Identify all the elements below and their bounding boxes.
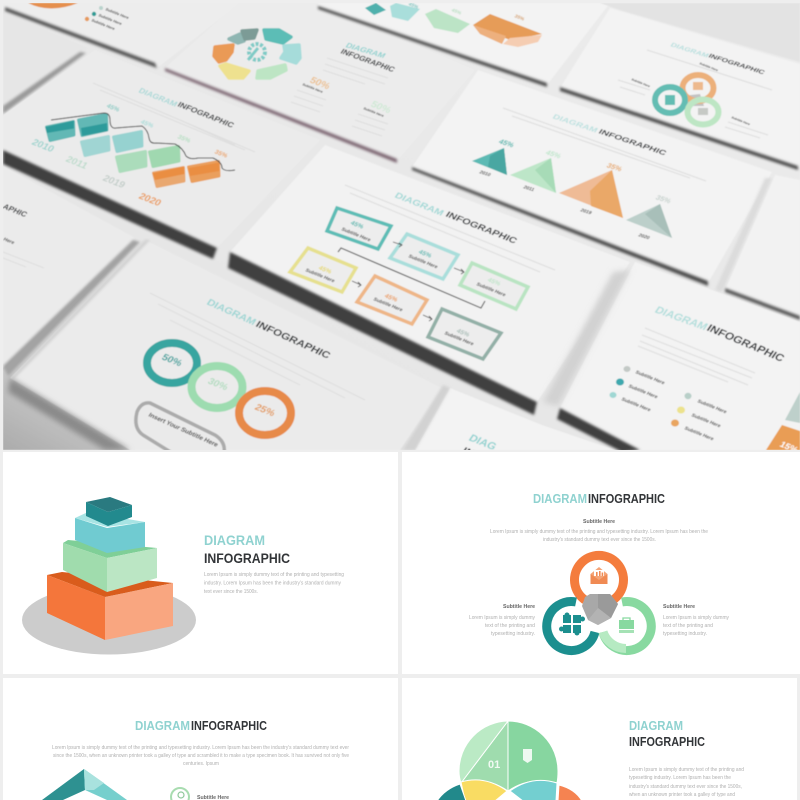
- panel: wheel slide: [163, 28, 399, 164]
- panel: three circle slide: Subtitle Here: [630, 78, 651, 88]
- chart: overlapping rings: [655, 75, 718, 124]
- chart: cropped pyramid shapes: [766, 392, 800, 454]
- text: right subtitle block: Subtitle Here: [663, 604, 695, 610]
- text: triangle years: 2011: [522, 185, 536, 193]
- text: pyramid body: text ever since the 1500s.: [204, 589, 258, 595]
- chart: triangles: [472, 148, 672, 238]
- flow box: teal: 45%: [349, 220, 365, 231]
- text: roof body: Lorem Ipsum is simply dummy text of the printing and typesetting industry. Lorem Ipsum has been the industry's standard dummy text ever: [52, 745, 349, 751]
- panel: wheel slide: Subtitle Here: [362, 107, 385, 118]
- chart: venn petals: [437, 721, 582, 800]
- panel: cubes slide: 45%: [450, 8, 463, 17]
- heading: venn title: INFOGRAPHIC: [629, 734, 706, 749]
- text: left subtitle block: text of the printing and: [485, 623, 535, 629]
- text: roof body: since the 1500s, when an unknown printer took a galley of type and scrambled it to make a type specimen book. It has survived not only five: [53, 753, 349, 759]
- panel: triangles slide: [412, 70, 772, 286]
- flow box: teal: Subtitle Here: [340, 227, 372, 243]
- panel: ring chart slide: [8, 240, 442, 453]
- heading: three circle slide title: DIAGRAM: [669, 42, 710, 59]
- panel: three circle slide: Subtitle Here: [698, 62, 719, 72]
- text: three ring subtitle: industry's standard dummy text ever since the 1500s.: [543, 537, 656, 543]
- flow box: green: [460, 263, 528, 309]
- heading: ring slide title: INFOGRAPHIC: [253, 319, 332, 361]
- text: three ring subtitle: [490, 519, 708, 543]
- heading: three circle slide title: INFOGRAPHIC: [707, 53, 766, 76]
- text: ring percentages: 25%: [252, 403, 277, 419]
- heading: three ring title: [533, 491, 666, 506]
- panel: cubes slide: [316, 3, 578, 88]
- list: colored bullets: Subtitle Here: [683, 426, 715, 442]
- text: pyramid body: Lorem Ipsum is simply dummy text of the printing and typesetting: [204, 572, 344, 578]
- heading: list slide title: INFOGRAPHIC: [704, 323, 787, 364]
- heading: roof title: DIAGRAM: [135, 718, 190, 733]
- arrow: connectors: [338, 242, 485, 321]
- text: ring percentages: 30%: [205, 377, 230, 393]
- text: 50 percent orange: 50%: [307, 76, 332, 92]
- text: left subtitle block: Lorem Ipsum is simply dummy: [469, 615, 535, 621]
- list: colored bullets: [610, 366, 728, 442]
- panel: left slide with cropped title: APHIC: [1, 202, 29, 219]
- flow box: orange: [357, 276, 427, 324]
- heading: roof title: INFOGRAPHIC: [191, 718, 268, 733]
- chart: stacked pyramid: [22, 497, 196, 654]
- text: venn body: when an unknown printer took a galley of type and: [629, 792, 735, 798]
- heading: flow chart slide title: [393, 191, 520, 246]
- panel: cubes slide: 45%: [407, 2, 420, 11]
- text: triangle years: 2020: [637, 233, 651, 241]
- list: colored bullets: Subtitle Here: [690, 413, 722, 429]
- panel: wheel slide: Subtitle Here: [301, 83, 324, 94]
- heading: flow chart slide title: INFOGRAPHIC: [444, 210, 520, 246]
- heading: triangles slide title: [552, 114, 667, 156]
- callout: subtitle pill: [136, 403, 224, 453]
- heading: three ring title: DIAGRAM: [533, 491, 587, 506]
- panel: three circle slide: [560, 3, 800, 170]
- flow box: light teal: Subtitle Here: [407, 254, 439, 270]
- icon: puzzle: [559, 612, 585, 636]
- flow box: yellow: Subtitle Here: [304, 268, 336, 284]
- text: right subtitle block: Lorem Ipsum is simply dummy: [663, 615, 729, 621]
- list: colored bullets: Subtitle Here: [627, 384, 659, 400]
- flow box: orange: Subtitle Here: [372, 297, 404, 313]
- flow box: green: 45%: [486, 277, 502, 288]
- text: right subtitle block: text of the printing and: [663, 623, 713, 629]
- panel: bottom cropped slide: [403, 385, 615, 460]
- text: right subtitle block: [663, 604, 729, 637]
- panel: left background slide: [3, 50, 86, 114]
- panel: left slide with cropped title: [3, 204, 140, 376]
- text: right subtitle block: typesetting industry.: [663, 631, 707, 637]
- callout: subtitle pill: Insert Your Subtitle Here: [147, 412, 220, 449]
- heading: ring slide title: [204, 297, 332, 361]
- panel: top left partial slide: [3, 3, 158, 70]
- text: triangle years: [478, 170, 651, 241]
- text: timeline percentages: [105, 103, 229, 160]
- icon: shield: [523, 749, 532, 763]
- panel: pyramid slide: [3, 452, 398, 674]
- text: timeline percentages: 35%: [213, 149, 229, 160]
- text: pyramid body: [204, 572, 344, 595]
- text: three ring subtitle: Subtitle Here: [583, 519, 615, 525]
- panel: top left partial slide: Subtitle Here: [97, 13, 124, 26]
- flow box: gray: [428, 309, 501, 359]
- panel: roof diagram slide: [3, 678, 398, 800]
- flow box: gray: Subtitle Here: [443, 331, 475, 347]
- heading: three circle slide title: [669, 42, 766, 76]
- heading: three ring title: INFOGRAPHIC: [588, 491, 666, 506]
- heading: timeline slide title: [137, 86, 236, 130]
- heading: wheel slide title: DIAGRAM: [344, 41, 388, 60]
- panel: bottom cropped slide: DIAG: [466, 433, 499, 453]
- text: timeline percentages: 45%: [139, 119, 155, 130]
- flow box: green: Subtitle Here: [475, 282, 507, 298]
- text: triangle percentages: 35%: [605, 161, 625, 173]
- panel: list slide: [543, 262, 800, 454]
- arrow: timeline line: [51, 113, 235, 171]
- chart: segmented wheel: [214, 30, 300, 78]
- list: colored bullets: Subtitle Here: [634, 370, 666, 386]
- chart: cropped pyramid shapes: 15%: [778, 440, 800, 454]
- text: 50 percent green: 50%: [368, 100, 393, 116]
- flow box: yellow: 45%: [317, 265, 333, 276]
- panel: top left partial slide: Subtitle Here: [104, 7, 131, 20]
- panel: top left partial slide: Subtitle Here: [90, 18, 117, 31]
- text: triangle years: 2010: [478, 170, 492, 178]
- text: timeline percentages: 45%: [105, 103, 121, 114]
- text: left subtitle block: typesetting industry.: [491, 631, 535, 637]
- flow box: light teal: 45%: [417, 249, 433, 260]
- panel: timeline slide: [3, 88, 236, 260]
- text: ring percentages: [159, 353, 277, 419]
- text: venn body: Lorem Ipsum is simply dummy text of the printing and: [629, 767, 744, 773]
- text: left subtitle block: [469, 604, 535, 637]
- heading: flow chart slide title: DIAGRAM: [393, 191, 446, 217]
- heading: wheel slide title: INFOGRAPHIC: [339, 47, 397, 74]
- panel: far right small slide: [715, 175, 800, 320]
- text: pyramid body: industry. Lorem Ipsum has been the industry's standard dummy: [204, 580, 341, 586]
- text: left subtitle block: Subtitle Here: [503, 604, 535, 610]
- flow box: light teal: [390, 234, 458, 279]
- panel: cubes slide: 35%: [513, 14, 526, 23]
- list: colored bullets: Subtitle Here: [620, 397, 652, 413]
- heading: ring slide title: DIAGRAM: [204, 297, 258, 328]
- heading: list slide title: [652, 305, 787, 364]
- heading: triangles slide title: DIAGRAM: [551, 112, 600, 134]
- text: venn body: typesetting industry. Lorem Ipsum has been the: [629, 775, 731, 781]
- text: timeline percentages: 35%: [176, 134, 192, 145]
- flow box: teal: [327, 208, 391, 249]
- flow box: orange: 45%: [383, 293, 399, 304]
- text: triangle percentages: [497, 137, 674, 205]
- text: timeline years: 2020: [136, 192, 164, 209]
- heading: roof title: [135, 718, 268, 733]
- text: triangle years: 2019: [579, 208, 593, 216]
- panel: perspective photo of slides: [1, 2, 800, 460]
- heading: pyramid title: [204, 533, 290, 566]
- heading: timeline slide title: INFOGRAPHIC: [176, 100, 236, 130]
- list: colored bullets: Subtitle Here: [696, 399, 728, 415]
- chart: three rings: [547, 555, 651, 651]
- chart: roof shape: [42, 769, 127, 800]
- text: venn body: industry's standard dummy text ever since the 1500s,: [629, 784, 742, 790]
- text: triangle percentages: 35%: [654, 193, 674, 205]
- text: three ring subtitle: Lorem Ipsum is simply dummy text of the printing and typesetting industry. Lorem Ipsum has been the: [490, 529, 708, 535]
- text: timeline years: 2019: [100, 174, 128, 191]
- chart: stepped timeline cells: [46, 114, 220, 186]
- heading: pyramid title: DIAGRAM: [204, 533, 265, 548]
- text: number 01: 01: [488, 759, 500, 771]
- flow box: gray: 45%: [455, 328, 471, 339]
- heading: list slide title: DIAGRAM: [652, 305, 710, 333]
- text: timeline years: [29, 138, 164, 209]
- icon: gear: [248, 44, 265, 60]
- heading: venn title: DIAGRAM: [629, 718, 683, 733]
- panel: flow chart slide: [228, 145, 630, 415]
- chart: three rings: [147, 343, 291, 435]
- text: ring percentages: 50%: [159, 353, 184, 369]
- panel: left slide with cropped title: Here: [2, 237, 16, 246]
- heading: venn title: [629, 718, 706, 749]
- icon: key badge: [171, 788, 189, 800]
- panel: three ring slide: [402, 452, 800, 674]
- icon: envelope: [590, 567, 608, 584]
- flow box: yellow: [290, 248, 356, 292]
- panel: bottom cropped slide: IN: [459, 446, 476, 460]
- panel: venn diagram slide: [402, 678, 797, 800]
- text: venn body: [629, 767, 744, 798]
- heading: pyramid title: INFOGRAPHIC: [204, 551, 290, 566]
- text: roof body: [52, 745, 349, 767]
- text: roof body: centuries. Ipsum: [183, 761, 219, 767]
- heading: triangles slide title: INFOGRAPHIC: [597, 127, 669, 157]
- text: triangle percentages: 45%: [544, 148, 564, 160]
- text: triangle percentages: 45%: [497, 137, 517, 149]
- text: timeline years: 2011: [63, 155, 90, 172]
- icon: briefcase: [619, 618, 634, 633]
- heading: timeline slide title: DIAGRAM: [137, 86, 180, 109]
- text: timeline years: 2010: [29, 138, 57, 155]
- panel: three circle slide: Subtitle Here: [730, 116, 751, 126]
